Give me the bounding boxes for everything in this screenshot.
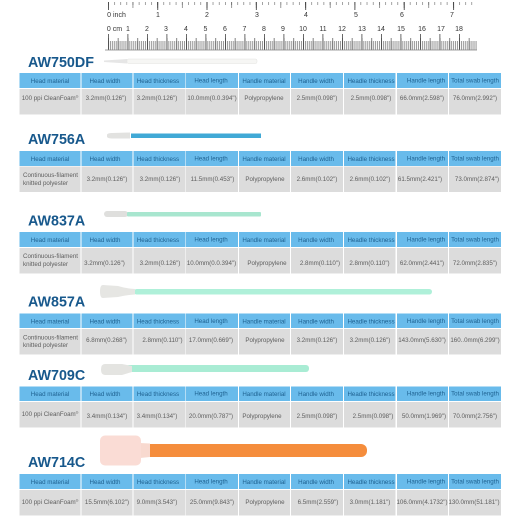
table value row: ® (76, 411, 79, 415)
table value row: 2.5mm(0.098") (297, 95, 337, 102)
spec table: AW837A (20, 232, 501, 274)
table header row: Total swab length (451, 236, 499, 244)
table value row: 9.0mm(3.543") (137, 499, 177, 506)
table value row: 3.2mm(0.126") (86, 95, 126, 102)
inch ruler: 1 (156, 12, 160, 19)
spec table: AW750DF (20, 73, 501, 114)
section: AW756A (20, 132, 501, 192)
table header row: Head width (90, 78, 121, 85)
table value row: Continuous-filament (23, 334, 78, 342)
spec table: AW714C (20, 474, 501, 516)
heading: AW709C: AW709C (28, 368, 85, 384)
table value row: 6.8mm(0.268") (86, 337, 127, 344)
table header row: Head length (194, 78, 228, 84)
inch ruler: 7 (450, 12, 454, 19)
centimetre ruler (105, 26, 477, 50)
inch ruler: 4 (304, 12, 308, 19)
table value row: 15.5mm(6.102") (85, 499, 129, 506)
inch ruler: 2 (205, 12, 209, 19)
centimetre ruler: 12 (338, 26, 346, 33)
table header row: Handle length (407, 390, 446, 398)
table header row: Handle length (407, 478, 446, 486)
table header row: Total swab length (451, 390, 499, 398)
table value row: 2.5mm(0.098") (297, 413, 337, 420)
inch ruler: 3 (255, 12, 259, 19)
table value row: Polypropylene (242, 413, 282, 420)
table value row: 66.0mm(2.598") (400, 95, 444, 102)
table header row: Total swab length (451, 156, 499, 162)
table value row: 2.5mm(0.098") (353, 413, 393, 420)
table value row: 72.0mm(2.835") (453, 260, 497, 267)
table header row: Head thickness (137, 391, 179, 398)
table header row (20, 386, 501, 401)
centimetre ruler: 13 (358, 26, 366, 33)
table value row: 100 ppi CleanFoam (22, 411, 76, 418)
table value row: Polypropylene (245, 337, 285, 344)
table value row: 2.8mm(0.110") (142, 337, 183, 344)
centimetre ruler: 14 (377, 26, 385, 33)
centimetre ruler: 8 (262, 26, 266, 33)
table value row: Polypropylene (247, 260, 287, 267)
table value row: 2.6mm(0.102") (350, 176, 390, 183)
table value row: 25.0mm(9.843") (190, 499, 234, 506)
table value row: 3.2mm(0.126") (140, 260, 180, 267)
centimetre ruler: 9 (281, 26, 285, 33)
table header row: Head width (90, 391, 121, 398)
table value row: 3.2mm(0.126") (140, 176, 180, 183)
table value row: knitted polyester (23, 180, 68, 187)
table value row (20, 490, 501, 516)
centimetre ruler: 6 (223, 26, 227, 33)
table value row: 20.0mm(0.787") (189, 413, 233, 420)
table header row: Headle thickness (347, 479, 395, 486)
table header row: Handle width (298, 318, 334, 326)
table header row (20, 151, 501, 166)
spec table: AW857A (20, 314, 501, 354)
swab: AW709C (101, 364, 309, 375)
centimetre ruler: 18 (455, 26, 463, 33)
swab: AW714C (100, 436, 367, 466)
table header row: Handle length (407, 318, 446, 325)
centimetre ruler: 5 (204, 26, 208, 33)
heading: AW750DF: AW750DF (28, 55, 94, 71)
table value row: 10.0mm(0.0.394") (187, 260, 236, 267)
section: AW714C (20, 436, 501, 516)
section: AW750DF (20, 55, 501, 114)
table header row: Head width (90, 237, 121, 244)
table value row: Polypropylene (245, 499, 285, 506)
table header row: Head width (90, 156, 121, 163)
inch ruler: 0 inch (107, 12, 126, 19)
table header row: Total swab length (451, 478, 499, 486)
centimetre ruler: 7 (243, 26, 247, 33)
table value row: 6.5mm(2.559") (298, 499, 338, 506)
table value row: 2.5mm(0.098") (351, 95, 391, 102)
swab: AW837A (104, 211, 261, 217)
table header row: Head length (194, 156, 228, 162)
table value row: 3.2mm(0.126") (87, 176, 127, 183)
table value row: Polypropylene (244, 95, 284, 102)
table value row: 2.6mm(0.102") (297, 176, 337, 183)
table header row: Head length (194, 318, 228, 325)
table value row: 130.0mm(51.181") (448, 499, 500, 506)
heading: AW857A: AW857A (28, 294, 85, 310)
table header row (20, 73, 501, 88)
inch ruler: 6 (400, 12, 404, 19)
table value row: knitted polyester (23, 342, 68, 349)
table header row: Head thickness (137, 318, 179, 326)
table header row: Head width (90, 318, 121, 326)
table value row: 11.5mm(0.453") (191, 176, 234, 183)
table header row (20, 232, 501, 247)
table value row: 143.0mm(5.630") (398, 337, 446, 344)
centimetre ruler: 11 (319, 26, 327, 33)
table value row: 3.2mm(0.126") (350, 337, 390, 344)
table header row (20, 474, 501, 489)
table header row: Head length (194, 390, 228, 398)
table header row: Head material (31, 237, 69, 244)
table value row (20, 329, 501, 354)
table header row: Head material (31, 78, 69, 85)
table header row (20, 314, 501, 328)
table value row: 61.5mm(2.421") (398, 176, 442, 183)
table value row: 3.4mm(0.134") (87, 413, 127, 420)
table value row: 3.4mm(0.134") (137, 413, 177, 420)
table value row: ® (76, 95, 79, 99)
swab: AW750DF (104, 59, 257, 64)
table header row: Handle width (298, 78, 334, 85)
centimetre ruler: 16 (418, 26, 426, 33)
table header row: Head material (31, 156, 69, 163)
section: AW837A (20, 211, 501, 274)
centimetre ruler: 2 (145, 26, 149, 33)
table header row: Handle material (242, 237, 286, 244)
centimetre ruler: 1 (126, 26, 130, 33)
table header row: Handle width (298, 237, 334, 244)
table value row: 2.8mm(0.110") (300, 260, 340, 267)
table value row: 76.0mm(2.992") (453, 95, 497, 102)
table header row: Total swab length (451, 78, 499, 84)
table value row: knitted polyester (23, 261, 68, 268)
table header row: Handle width (298, 156, 334, 163)
table value row: ® (76, 499, 79, 503)
table value row: 50.0mm(1.969") (402, 413, 446, 420)
table header row: Handle length (407, 156, 446, 162)
table header row: Handle material (242, 391, 286, 398)
table header row: Head material (31, 318, 69, 326)
table value row: Continuous-filament (23, 172, 78, 179)
table value row: 70.0mm(2.756") (453, 413, 497, 420)
table header row: Head length (194, 236, 228, 244)
heading: AW837A: AW837A (28, 214, 85, 230)
table value row: 160..0mm(6.299") (450, 337, 500, 344)
centimetre ruler: 15 (397, 26, 405, 33)
table value row: 3.0mm(1.181") (350, 499, 390, 506)
centimetre ruler: 10 (299, 26, 307, 33)
heading: AW714C: AW714C (28, 455, 85, 471)
table header row: Head thickness (137, 479, 179, 486)
table header row: Head length (194, 478, 228, 486)
table header row: Head material (31, 479, 69, 486)
table value row: 73.0mm(2.874") (455, 176, 499, 183)
table header row: Handle material (242, 318, 286, 326)
section: AW709C (20, 364, 501, 428)
table header row: Head thickness (137, 78, 179, 85)
table header row: Handle width (298, 479, 334, 486)
centimetre ruler: 0 cm (107, 26, 122, 33)
table header row: Head thickness (137, 237, 179, 244)
centimetre ruler: 4 (184, 26, 188, 33)
table value row (20, 166, 501, 192)
table header row: Headle thickness (347, 318, 395, 326)
section: AW857A (20, 285, 501, 354)
centimetre ruler: 17 (437, 26, 445, 33)
table value row: 100 ppi CleanFoam (22, 95, 76, 102)
table value row: Continuous-filament (23, 253, 78, 260)
table header row: Headle thickness (347, 78, 395, 85)
heading: AW756A: AW756A (28, 132, 85, 148)
spec table: AW756A (20, 151, 501, 192)
inch ruler: 5 (354, 12, 358, 19)
table value row (20, 248, 501, 274)
table header row: Handle length (407, 78, 446, 84)
spec table: AW709C (20, 386, 501, 428)
table header row: Total swab length (451, 318, 499, 325)
swab: AW756A (107, 132, 261, 138)
table header row: Handle width (298, 391, 334, 398)
table header row: Handle material (242, 156, 286, 163)
table value row (20, 89, 501, 114)
table value row: Polypropylene (245, 176, 285, 183)
table value row (20, 402, 501, 428)
table value row: 62.0mm(2.441") (400, 260, 444, 267)
table header row: Handle material (242, 78, 286, 85)
table header row: Head material (31, 391, 69, 398)
swab: AW857A (100, 285, 432, 298)
table header row: Head thickness (137, 156, 179, 163)
table value row: 100 ppi CleanFoam (22, 499, 76, 506)
table header row: Handle length (407, 236, 446, 244)
table value row: 3.2mm(0.126") (297, 337, 337, 344)
table value row: 17.0mm(0.669") (189, 337, 233, 344)
table header row: Handle material (242, 479, 286, 486)
table value row: 3.2mm(0.126") (84, 260, 125, 267)
table header row: Headle thickness (347, 156, 395, 163)
inch ruler (107, 2, 477, 19)
table value row: 10.0mm(0.0.394") (187, 95, 237, 102)
table value row: 2.8mm(0.110") (349, 260, 390, 267)
table header row: Headle thickness (347, 237, 395, 244)
table header row: Head width (90, 479, 121, 486)
table header row: Headle thickness (347, 391, 395, 398)
centimetre ruler: 3 (164, 26, 168, 33)
table value row: 3.2mm(0.126") (137, 95, 177, 102)
table value row: 106.0mm(4.1732") (396, 499, 448, 506)
